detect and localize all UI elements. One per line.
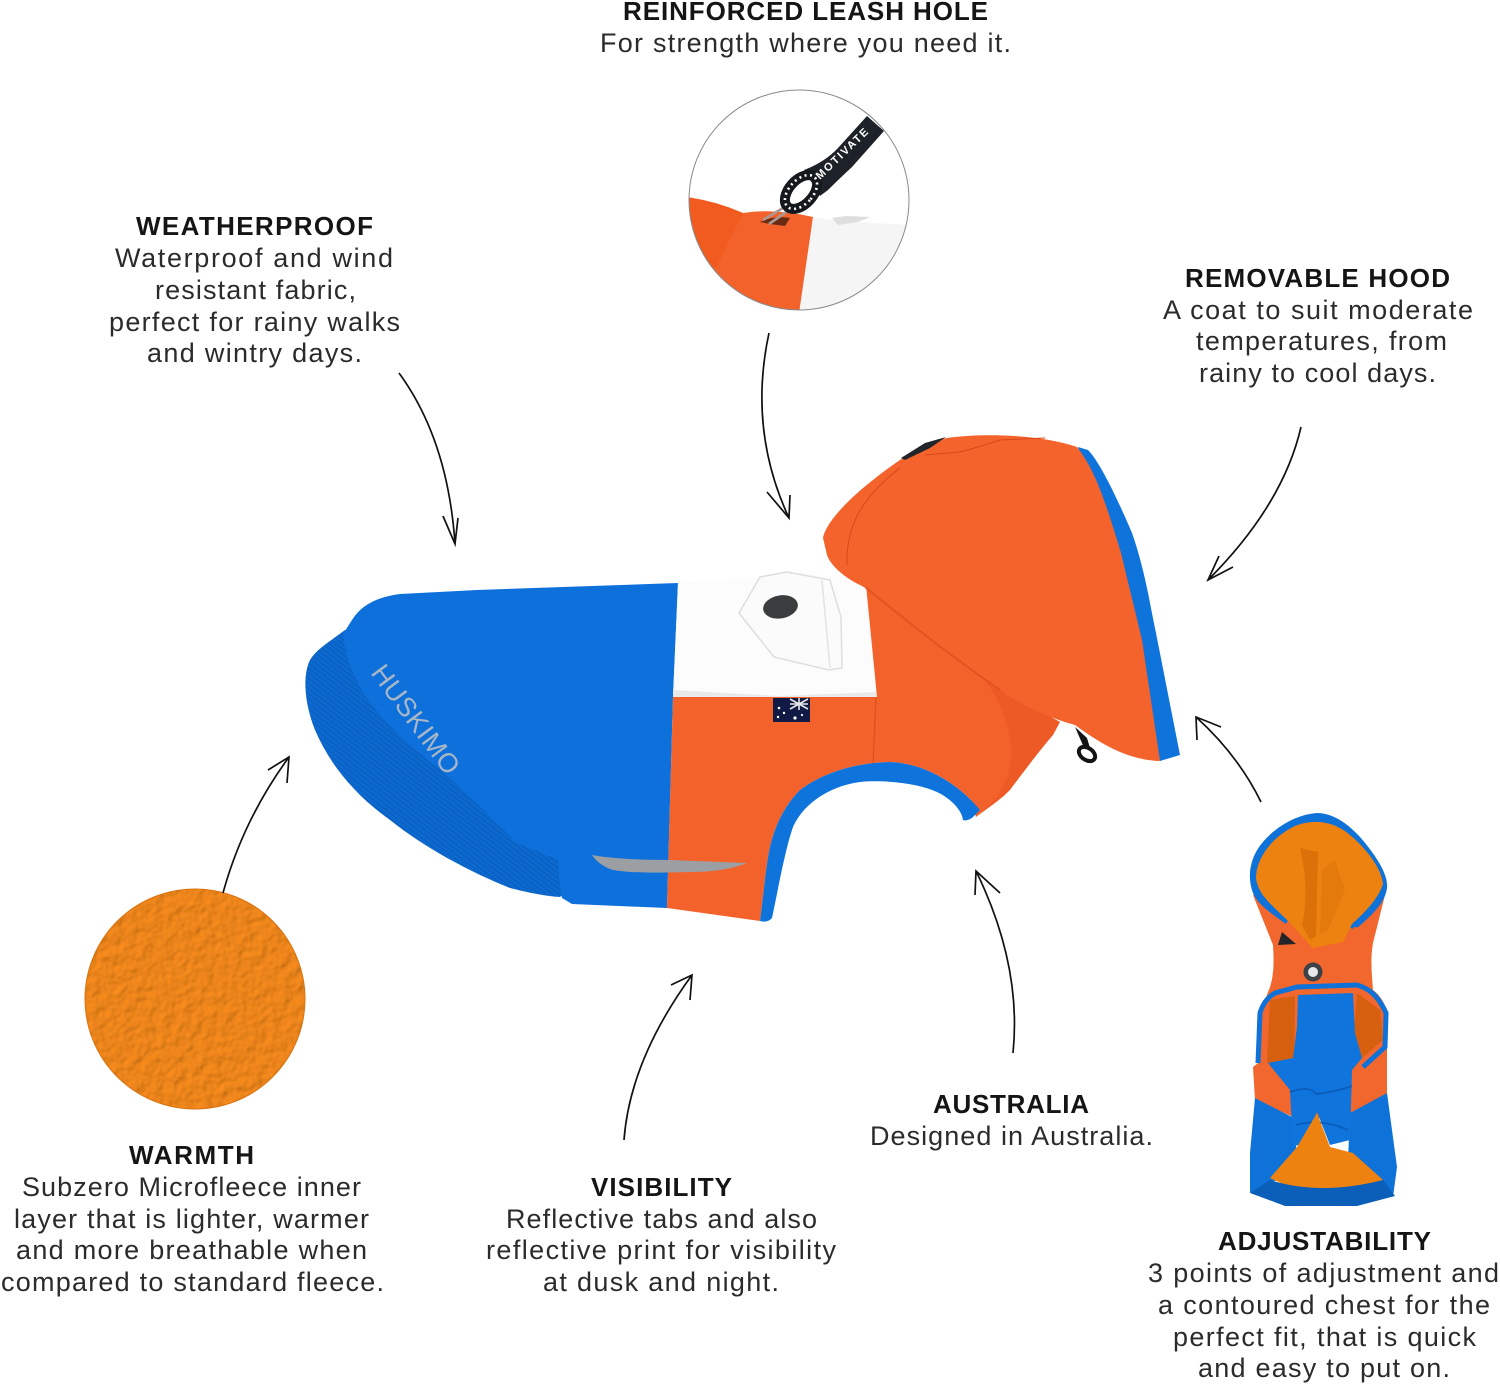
callout: warmth (1, 1140, 384, 1297)
heading: WEATHERPROOF (136, 211, 373, 241)
orange front body (667, 585, 1011, 921)
main product: dog coat side view (305, 435, 1180, 922)
hood top tag (901, 437, 946, 460)
inset circle: orange fleece swatch (85, 889, 305, 1109)
description: and easy to put on. (1198, 1353, 1450, 1383)
description: resistant fabric, (155, 275, 356, 305)
description: rainy to cool days. (1199, 358, 1436, 388)
small product: underside view of coat (1250, 813, 1397, 1206)
description (1148, 1258, 1499, 1383)
arrow: visibility (624, 975, 692, 1140)
hood blue rim (1250, 813, 1387, 930)
description: Waterproof and wind (115, 243, 393, 273)
description: Designed in Australia. (870, 1121, 1153, 1151)
blue belly (1268, 993, 1362, 1147)
blue armhole trim (760, 762, 980, 922)
callout: weatherproof (109, 211, 400, 368)
fleece tail opening (1270, 1113, 1383, 1192)
callout: reinforced leash hole (600, 0, 1011, 58)
description (1163, 295, 1473, 388)
collar flaps (1273, 921, 1376, 950)
arrow: australia (975, 871, 1014, 1053)
description: Subzero Microfleece inner (22, 1172, 361, 1202)
description: and more breathable when (16, 1235, 367, 1265)
description: Reflective tabs and also (506, 1204, 817, 1234)
description: at dusk and night. (543, 1267, 779, 1297)
arrow: weatherproof to coat (399, 373, 458, 544)
arrow: removable hood (1208, 427, 1301, 580)
description (109, 243, 400, 368)
hood (823, 435, 1160, 761)
white collar panel (673, 572, 877, 697)
Australian flag label (773, 698, 810, 722)
hood blue edge (1078, 447, 1180, 761)
neck under hood (976, 680, 1060, 817)
description: a contoured chest for the (1158, 1290, 1490, 1320)
body fill behind neck (960, 680, 1040, 817)
inset circle: leash attached to coat: MOTIVATE (814, 126, 871, 182)
ribbed tail hem (305, 630, 580, 897)
callout: removable hood (1163, 263, 1473, 388)
armhole blue trim (1258, 985, 1386, 1067)
description: reflective print for visibility (486, 1235, 836, 1265)
fleece hood lining (1256, 822, 1383, 948)
inset circle: leash attached to coat (680, 90, 910, 320)
callout: visibility (486, 1172, 836, 1297)
heading: AUSTRALIA (933, 1089, 1089, 1119)
description: and wintry days. (147, 338, 362, 368)
description (1, 1172, 384, 1297)
arrow: adjustability (1196, 717, 1261, 802)
heading: REMOVABLE HOOD (1185, 263, 1450, 293)
reflective strip (592, 855, 747, 873)
collar seam (873, 697, 876, 765)
lower blue sides (1250, 1098, 1300, 1193)
callout: australia (870, 1089, 1153, 1151)
pocket flap with snap button (739, 572, 842, 670)
description: perfect fit, that is quick (1173, 1322, 1476, 1352)
blue rear body (343, 583, 678, 908)
description: 3 points of adjustment and (1148, 1258, 1499, 1288)
description (486, 1204, 836, 1297)
arrow: leash hole to coat (762, 333, 790, 518)
HUSKIMO reflective logo: HUSKIMO (365, 659, 466, 780)
description: temperatures, from (1196, 326, 1447, 356)
callout: adjustability (1148, 1226, 1499, 1383)
description: A coat to suit moderate (1163, 295, 1473, 325)
hood seam (847, 438, 1045, 565)
heading: WARMTH (129, 1140, 254, 1170)
silhouette shell (1253, 887, 1387, 1120)
description: compared to standard fleece. (1, 1267, 384, 1297)
hood lower edge shadow (866, 588, 1000, 690)
arrow: warmth (223, 757, 289, 893)
heading: ADJUSTABILITY (1218, 1226, 1431, 1256)
description: layer that is lighter, warmer (14, 1204, 369, 1234)
description: perfect for rainy walks (109, 307, 400, 337)
description: For strength where you need it. (600, 28, 1011, 58)
inner armhole lining (1267, 996, 1295, 1063)
heading: VISIBILITY (591, 1172, 732, 1202)
zipper pull (1075, 727, 1098, 764)
dark blue hem (1250, 1180, 1395, 1206)
chest badge (1304, 962, 1322, 982)
